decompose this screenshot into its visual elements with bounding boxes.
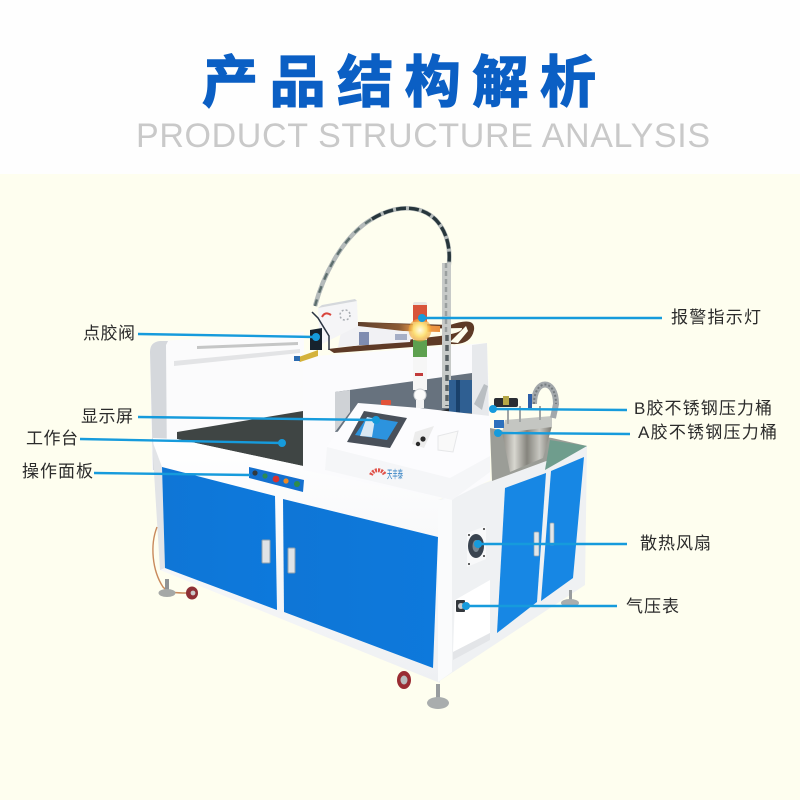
front-left cabinet door — [162, 467, 277, 610]
alarm tower light — [408, 302, 432, 408]
label: cooling fan: 散热风扇 — [640, 534, 711, 553]
leader line: display screen — [138, 416, 380, 424]
vertical hose guide — [438, 263, 456, 417]
leader line: tank A — [494, 429, 630, 437]
leader line: dispensing valve — [138, 333, 320, 341]
dispenser upper module — [303, 343, 490, 500]
air gauge recess — [453, 580, 490, 660]
cabinet base — [152, 438, 587, 683]
rear left leveling foot — [158, 579, 176, 597]
label: air gauge: 气压表 — [626, 597, 679, 616]
touch screen — [347, 411, 407, 448]
label: tank B: B胶不锈钢压力桶 — [634, 399, 772, 418]
side cabinet door one — [497, 473, 546, 633]
subtitle: PRODUCT STRUCTURE ANALYSIS — [136, 117, 710, 155]
brand logo — [371, 467, 403, 481]
work table — [177, 411, 303, 466]
rear caster — [186, 586, 198, 600]
label: dispensing valve: 点胶阀 — [83, 324, 135, 343]
front leveling foot — [427, 684, 449, 709]
leader line: cooling fan — [474, 540, 627, 548]
label: work table: 工作台 — [26, 429, 78, 448]
pressure tank bay — [474, 384, 587, 481]
leader line: alarm light — [418, 314, 662, 322]
side cabinet door two — [541, 457, 584, 601]
label: alarm indicator: 报警指示灯 — [671, 308, 761, 327]
control panel strip — [249, 467, 304, 492]
orange air cable — [153, 527, 187, 593]
leader line: tank B — [489, 405, 627, 413]
right leveling foot — [561, 590, 579, 607]
left back panel — [150, 332, 304, 470]
label: control panel: 操作面板 — [22, 462, 93, 481]
front caster — [397, 671, 411, 689]
machine illustration: 天丰泰 — [387, 467, 403, 481]
gantry with dispensing head — [294, 299, 412, 362]
leader line: air gauge — [462, 602, 617, 610]
label: tank A: A胶不锈钢压力桶 — [638, 423, 777, 442]
label: display screen: 显示屏 — [81, 407, 133, 426]
leader line: work table — [80, 439, 286, 447]
drag chain loop — [328, 321, 474, 353]
blue motor — [449, 380, 472, 413]
front-right cabinet door — [283, 499, 438, 668]
machine illustration — [150, 208, 587, 709]
control console — [325, 400, 490, 500]
air hose arc — [315, 208, 449, 306]
leader line: control panel — [94, 473, 250, 475]
title: 产品结构解析 — [202, 51, 596, 114]
cooling fan — [467, 526, 486, 567]
